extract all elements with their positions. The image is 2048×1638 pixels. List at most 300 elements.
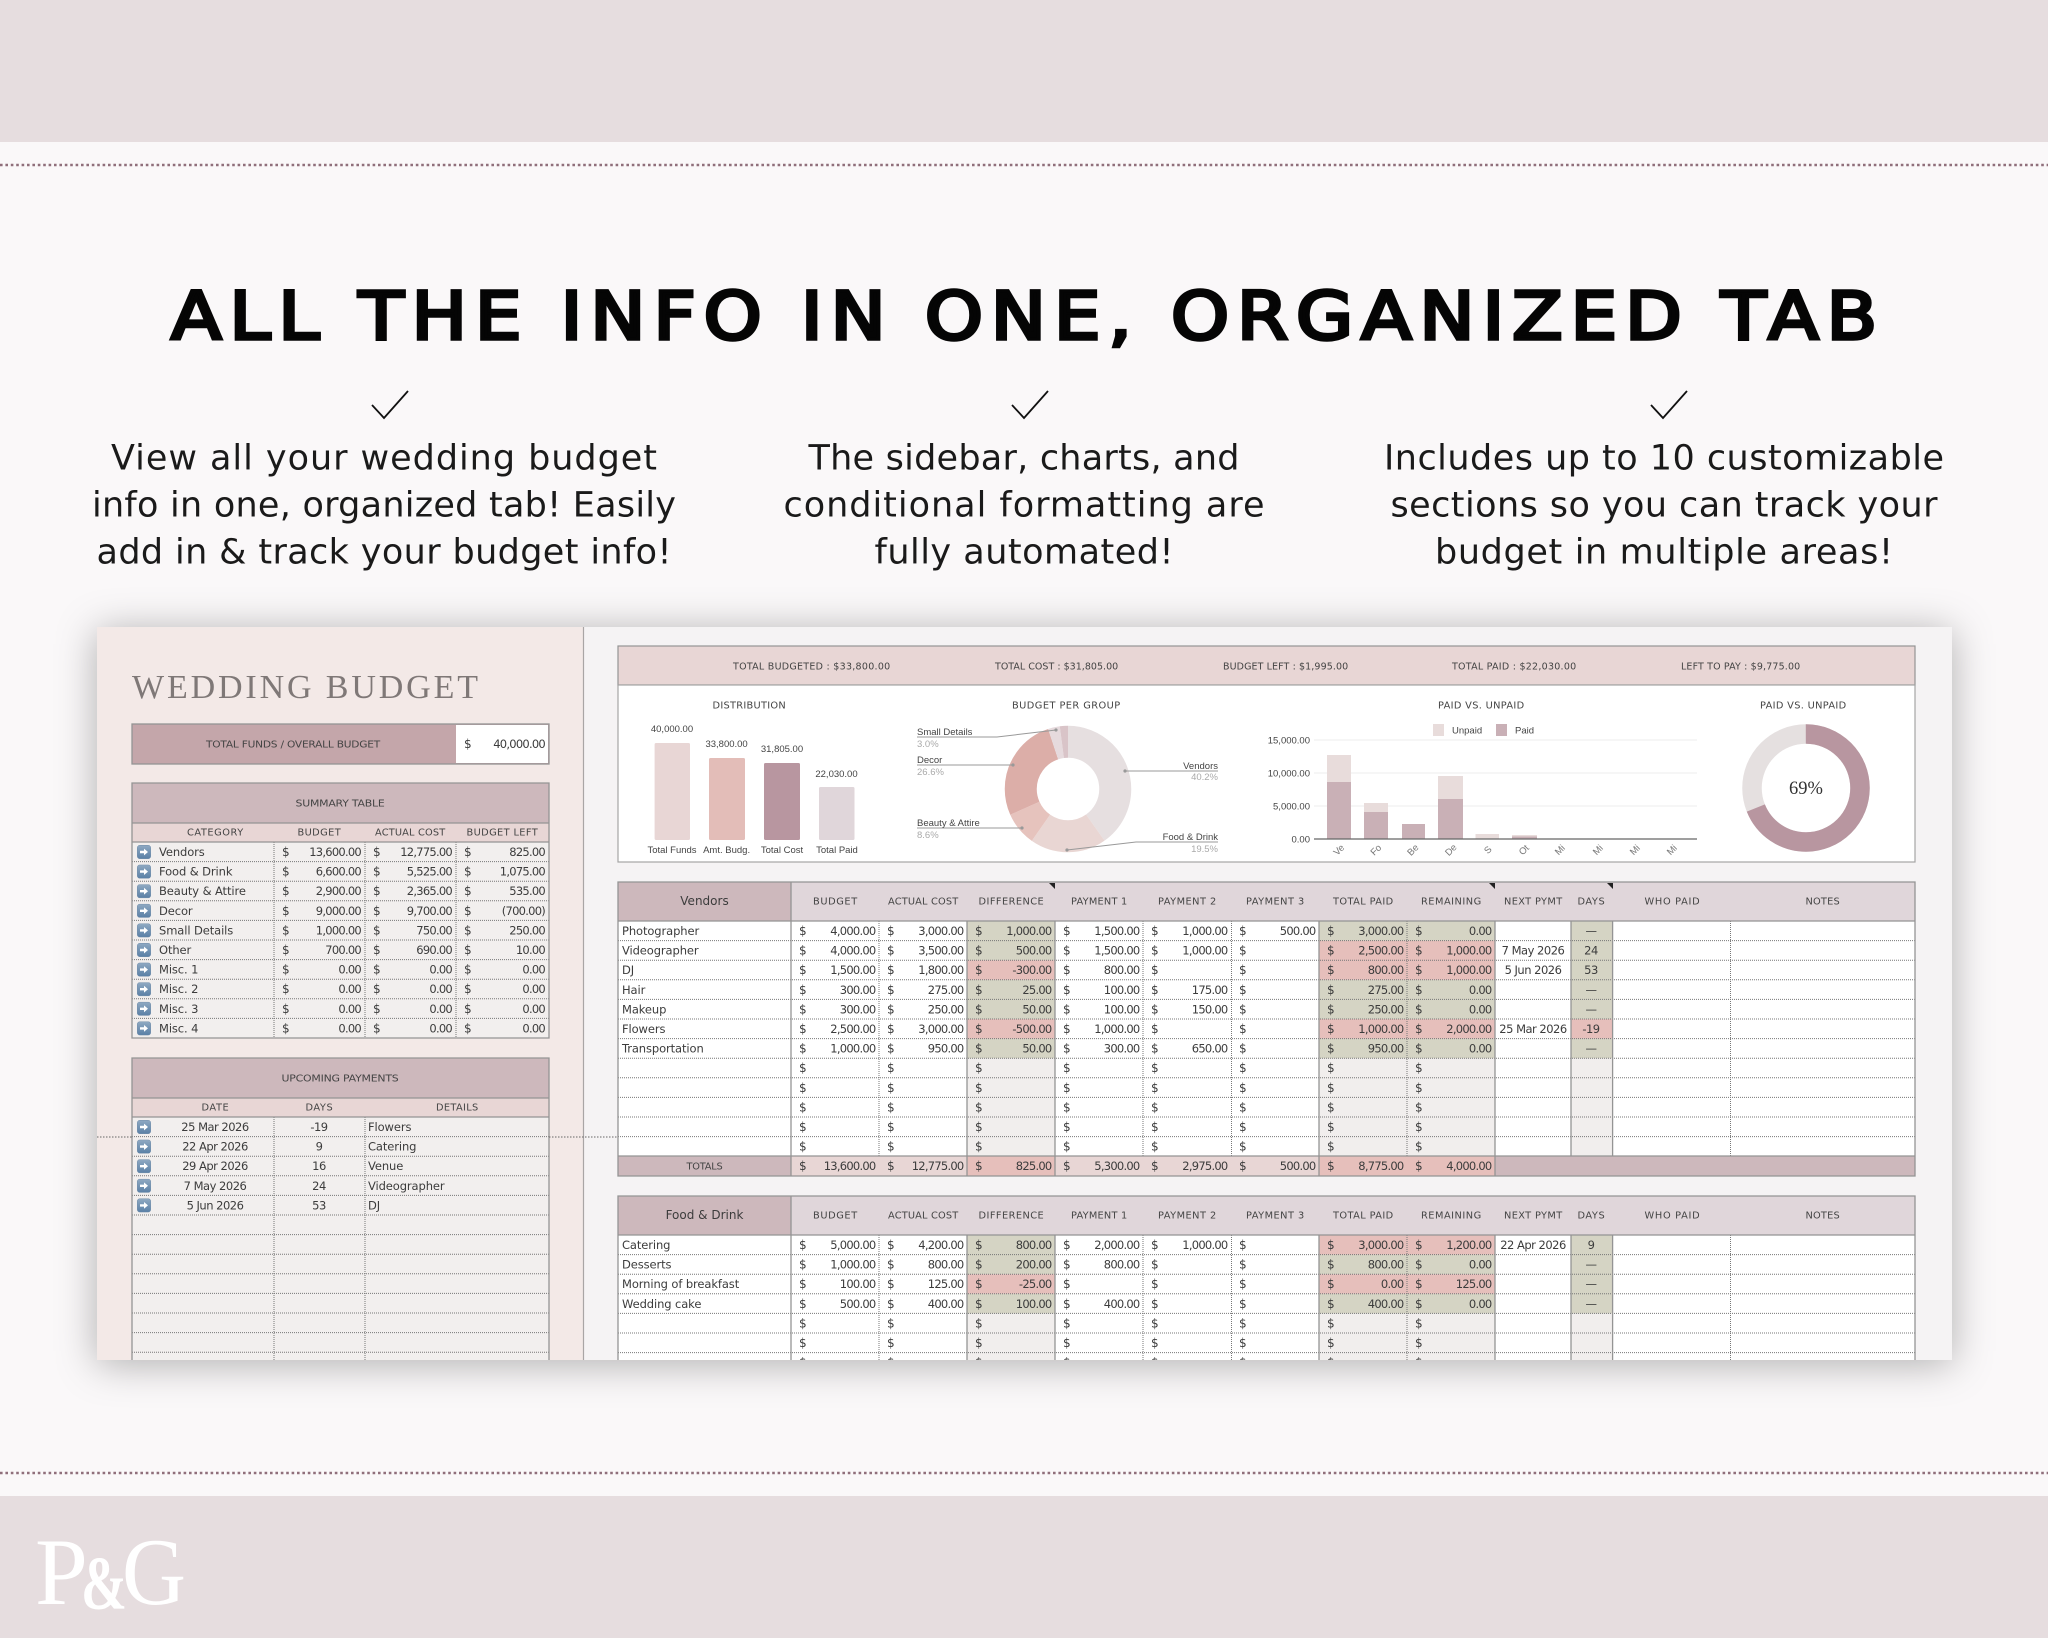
food and drink rows: $$$$$$$$ <box>799 1316 1423 1330</box>
vendors rows: TOTALS <box>685 1161 723 1172</box>
vendors rows: $$$$$$$$ <box>799 1120 1423 1134</box>
summary table: $$$ <box>282 865 472 879</box>
summary table: $$$ <box>282 884 472 898</box>
chart: budget per group donut: 19.5% <box>1191 844 1219 855</box>
vendors rows: 1,800.00 <box>918 963 964 977</box>
icon: check mark 2 <box>1012 391 1048 418</box>
logo: P&G: & <box>81 1542 127 1626</box>
logo: P&G <box>35 1519 186 1626</box>
food and drink header row: TOTAL PAID <box>1332 1210 1393 1221</box>
chart: budget per group donut: 26.6% <box>917 767 944 778</box>
summary table: 13,600.00 <box>309 845 361 859</box>
vendors rows: 3,000.00 <box>1358 924 1404 938</box>
chart: distribution bars: Total Funds <box>647 845 697 856</box>
chart: distribution bars: Total Paid <box>816 845 858 856</box>
summary table <box>132 783 549 1038</box>
upcoming payments table: 25 Mar 2026 <box>181 1120 249 1134</box>
vendors rows: $$$$$$$$ <box>799 983 1423 997</box>
upcoming payments table: -19 <box>310 1120 328 1134</box>
feature text 2: conditional formatting are <box>784 486 1264 526</box>
chart: budget per group donut: Vendors <box>1183 761 1218 772</box>
vendors rows: 5 Jun 2026 <box>1505 963 1562 977</box>
summary table: SUMMARY TABLE <box>296 798 384 809</box>
upcoming payments table: UPCOMING PAYMENTS <box>282 1073 398 1084</box>
food and drink header row: PAYMENT 1 <box>1071 1210 1127 1221</box>
food and drink rows: 0.00 <box>1469 1258 1492 1272</box>
total funds box: TOTAL FUNDS / OVERALL BUDGET <box>205 739 381 750</box>
summary table: Misc. 1 <box>159 963 198 977</box>
vendors rows: 1,000.00 <box>830 1042 876 1056</box>
food and drink header row: Food & Drink <box>666 1208 743 1222</box>
feature text 3: budget in multiple areas! <box>1435 532 1893 572</box>
chart: distribution bars <box>647 700 858 856</box>
chart: distribution bars: DISTRIBUTION <box>712 700 786 711</box>
vendors rows: 13,600.00 <box>824 1159 876 1173</box>
summary table: 2,900.00 <box>316 884 361 898</box>
food and drink rows: 0.00 <box>1469 1297 1492 1311</box>
chart: budget per group donut: 3.0% <box>917 739 939 750</box>
vendors rows: 1,500.00 <box>1094 944 1140 958</box>
food and drink rows: Wedding cake <box>622 1297 701 1311</box>
food and drink header row: ACTUAL COST <box>888 1210 959 1221</box>
vendors rows: 150.00 <box>1192 1002 1228 1016</box>
food and drink header row: PAYMENT 2 <box>1158 1210 1216 1221</box>
food and drink header row: NOTES <box>1806 1210 1840 1221</box>
summary table: (700.00) <box>502 904 545 918</box>
summary table: 700.00 <box>325 943 361 957</box>
feature text 2: The sidebar, charts, and <box>808 438 1240 478</box>
chart: budget per group donut: Food & Drink <box>1163 832 1218 843</box>
vendors rows: 650.00 <box>1192 1042 1228 1056</box>
summary table: 0.00 <box>338 963 361 977</box>
vendors rows: 175.00 <box>1192 983 1228 997</box>
vendors rows: 5,300.00 <box>1094 1159 1140 1173</box>
summary table: Other <box>159 943 192 957</box>
totals summary strip: TOTAL COST : $31,805.00 <box>994 661 1118 672</box>
vendors rows: $$$$$$$$ <box>799 1159 1423 1173</box>
food and drink header row: NEXT PYMT <box>1504 1210 1563 1221</box>
feature text 3: Includes up to 10 customizable <box>1384 438 1944 478</box>
food and drink rows: 100.00 <box>1016 1297 1052 1311</box>
upcoming payments table: Flowers <box>368 1120 411 1134</box>
vendors rows: $$$$$$$$ <box>799 944 1423 958</box>
vendors rows: Hair <box>622 983 646 997</box>
feature column 1 <box>92 391 676 572</box>
total funds box: 40,000.00 <box>493 737 545 751</box>
vendors rows: 950.00 <box>928 1042 964 1056</box>
chart: paid vs unpaid stacked bars: Be <box>1405 842 1421 858</box>
vendors rows: 2,975.00 <box>1182 1159 1228 1173</box>
chart: paid vs unpaid stacked bars: Unpaid <box>1452 726 1482 736</box>
vendors totals row fills <box>618 1156 1915 1176</box>
top band <box>0 0 2048 142</box>
vendors header row: REMAINING <box>1421 896 1481 907</box>
upcoming payments table: DATE <box>202 1102 228 1113</box>
summary table: Misc. 3 <box>159 1002 198 1016</box>
summary table: 250.00 <box>509 923 545 937</box>
food and drink header row: DIFFERENCE <box>978 1210 1044 1221</box>
food and drink rows: $$$$$$$$ <box>799 1356 1423 1370</box>
vendors rows: 0.00 <box>1469 1042 1492 1056</box>
summary table: 10.00 <box>516 943 545 957</box>
chart: paid percentage donut <box>1752 700 1860 842</box>
food and drink header row: BUDGET <box>813 1210 858 1221</box>
food and drink rows: 2,000.00 <box>1094 1238 1140 1252</box>
vendors rows: 53 <box>1584 963 1598 977</box>
vendors rows: Flowers <box>622 1022 665 1036</box>
food and drink table <box>618 1196 1915 1370</box>
vendors rows: $$$$$$$$ <box>799 1061 1423 1075</box>
upcoming payments table: 29 Apr 2026 <box>182 1159 248 1173</box>
logo: P&G: P <box>35 1519 88 1625</box>
chart: paid vs unpaid stacked bars: Ve <box>1332 843 1347 858</box>
food and drink rows: 1,200.00 <box>1446 1238 1492 1252</box>
vendors rows: 800.00 <box>1368 963 1404 977</box>
vendors rows: 800.00 <box>1104 963 1140 977</box>
summary table: Misc. 4 <box>159 1021 198 1035</box>
upcoming payments table: DJ <box>368 1198 380 1212</box>
chart: paid vs unpaid stacked bars: 5,000.00 <box>1273 802 1310 812</box>
vendors rows: 825.00 <box>1016 1159 1052 1173</box>
vendors header row: DIFFERENCE <box>978 896 1044 907</box>
vendors rows: 7 May 2026 <box>1502 944 1565 958</box>
summary table: $$$ <box>282 1002 472 1016</box>
vendors rows: 2,500.00 <box>1358 944 1404 958</box>
vendors rows: 4,000.00 <box>830 924 876 938</box>
upcoming payments table <box>132 1058 549 1360</box>
bottom band <box>0 1496 2048 1638</box>
food and drink header row <box>618 1196 1915 1235</box>
totals summary strip: TOTAL PAID : $22,030.00 <box>1451 661 1576 672</box>
summary table: 825.00 <box>509 845 545 859</box>
vendors rows: 100.00 <box>1104 983 1140 997</box>
food and drink rows: Catering <box>622 1238 670 1252</box>
upcoming payments table: 7 May 2026 <box>184 1179 247 1193</box>
chart: budget per group donut <box>917 700 1219 855</box>
spreadsheet screenshot <box>97 627 1915 1370</box>
vendors header row <box>618 882 1915 921</box>
food and drink rows: 9 <box>1588 1238 1595 1252</box>
vendors rows: 275.00 <box>928 983 964 997</box>
summary table: 12,775.00 <box>400 845 452 859</box>
summary table: Vendors <box>159 845 205 859</box>
vendors rows: 4,000.00 <box>830 944 876 958</box>
chart: paid vs unpaid stacked bars: Mi <box>1591 843 1606 858</box>
totals summary strip: LEFT TO PAY : $9,775.00 <box>1681 661 1800 672</box>
food and drink rows: 3,000.00 <box>1358 1238 1404 1252</box>
chart: paid vs unpaid stacked bars: PAID VS. UNPAID <box>1438 700 1524 711</box>
food and drink rows: 0.00 <box>1381 1277 1404 1291</box>
food and drink rows: 1,000.00 <box>1182 1238 1228 1252</box>
food and drink rows: 500.00 <box>840 1297 876 1311</box>
summary table: $$$ <box>282 943 472 957</box>
vendors rows: 1,000.00 <box>1446 944 1492 958</box>
sidebar panel <box>97 627 584 1360</box>
feature text 3: sections so you can track your <box>1390 486 1938 526</box>
vendors rows: 3,000.00 <box>918 1022 964 1036</box>
vendors rows <box>621 924 1600 1173</box>
chart: paid vs unpaid stacked bars: S <box>1482 844 1494 856</box>
vendors rows: $$$$$$$$ <box>799 1100 1423 1114</box>
chart: budget per group donut: BUDGET PER GROUP <box>1012 700 1120 711</box>
summary table: 0.00 <box>429 963 452 977</box>
food and drink rows: Desserts <box>622 1258 672 1272</box>
summary table: $$$ <box>282 845 472 859</box>
feature column 2 <box>784 391 1264 572</box>
chart: paid vs unpaid stacked bars: Mi <box>1665 843 1680 858</box>
chart: budget per group donut: Small Details <box>917 727 973 738</box>
spreadsheet shadow <box>97 627 1952 1360</box>
summary table: $$$ <box>282 904 472 918</box>
food and drink rows: — <box>1586 1297 1596 1311</box>
summary table: 9,000.00 <box>316 904 361 918</box>
page guide line <box>97 1136 618 1138</box>
vendors rows: Makeup <box>622 1002 666 1016</box>
chart: paid vs unpaid stacked bars: Fo <box>1369 843 1384 858</box>
chart: distribution bars: 33,800.00 <box>705 739 748 750</box>
vendors rows: -300.00 <box>1012 963 1052 977</box>
chart: paid vs unpaid stacked bars: 10,000.00 <box>1268 768 1310 780</box>
chart: distribution bars: 31,805.00 <box>761 744 803 755</box>
summary table: 0.00 <box>522 963 545 977</box>
chart: paid vs unpaid stacked bars: Mi <box>1553 843 1568 858</box>
vendors rows: $$$$$$$$ <box>799 1140 1423 1154</box>
summary table: 5,525.00 <box>407 865 452 879</box>
chart: paid vs unpaid stacked bars: 0.00 <box>1292 834 1310 846</box>
vendors header row: PAYMENT 3 <box>1246 896 1304 907</box>
vendors row fills <box>618 921 1915 1176</box>
totals summary strip: TOTAL BUDGETED : $33,800.00 <box>732 661 890 672</box>
upcoming payments table: 53 <box>312 1198 326 1212</box>
chart: budget per group donut: 40.2% <box>1191 772 1219 783</box>
summary table: 750.00 <box>416 923 452 937</box>
food and drink header row: REMAINING <box>1421 1210 1481 1221</box>
food and drink rows <box>622 1238 1596 1370</box>
vendors rows: Videographer <box>622 944 699 958</box>
vendors header row: NOTES <box>1806 896 1840 907</box>
vendors rows: 4,000.00 <box>1446 1159 1492 1173</box>
vendors rows: 25.00 <box>1022 983 1052 997</box>
summary table: Food & Drink <box>159 865 233 879</box>
upcoming payments table: 5 Jun 2026 <box>187 1198 244 1212</box>
chart: paid vs unpaid stacked bars: 15,000.00 <box>1268 736 1310 746</box>
summary table: $$$ <box>282 1021 472 1035</box>
summary table: 1,000.00 <box>316 923 361 937</box>
summary table: BUDGET <box>298 827 342 838</box>
vendors rows: 300.00 <box>840 983 876 997</box>
food and drink rows: 800.00 <box>928 1258 964 1272</box>
summary table: 690.00 <box>416 943 452 957</box>
chart: paid percentage donut: 69% <box>1789 779 1823 799</box>
upcoming payments table: Venue <box>368 1159 403 1173</box>
summary table: 0.00 <box>522 1002 545 1016</box>
chart: distribution bars: Total Cost <box>761 845 803 856</box>
food and drink row fills <box>618 1235 1915 1360</box>
vendors rows: 950.00 <box>1368 1042 1404 1056</box>
food and drink rows: Morning of breakfast <box>622 1277 740 1291</box>
total funds box: $ <box>464 737 472 751</box>
chart: distribution bars: 40,000.00 <box>651 724 693 735</box>
vendors rows: 2,500.00 <box>830 1022 876 1036</box>
title: ALL THE INFO IN ONE, ORGANIZED TAB <box>171 278 1885 355</box>
summary table: CATEGORY <box>187 827 243 838</box>
food and drink rows: 800.00 <box>1016 1238 1052 1252</box>
vendors rows: 500.00 <box>1280 1159 1316 1173</box>
chart: budget per group donut: 8.6% <box>917 830 939 841</box>
upcoming payments table: 22 Apr 2026 <box>182 1140 248 1154</box>
food and drink rows: 5,000.00 <box>830 1238 876 1252</box>
vendors rows: 300.00 <box>840 1002 876 1016</box>
totals summary strip <box>618 646 1915 685</box>
food and drink rows: 100.00 <box>840 1277 876 1291</box>
vendors rows: 275.00 <box>1368 983 1404 997</box>
vendors header row: TOTAL PAID <box>1332 896 1393 907</box>
summary table: 535.00 <box>509 884 545 898</box>
chart: distribution bars: Amt. Budg. <box>703 845 750 856</box>
vendors rows: 500.00 <box>1016 944 1052 958</box>
feature text 1: View all your wedding budget <box>111 438 657 478</box>
vendors rows: 1,500.00 <box>830 963 876 977</box>
vendors rows: 1,000.00 <box>1358 1022 1404 1036</box>
vendors rows: 1,000.00 <box>1182 924 1228 938</box>
vendors rows: 50.00 <box>1022 1042 1052 1056</box>
vendors header row: PAYMENT 2 <box>1158 896 1216 907</box>
vendors rows: $$$$$$$$ <box>799 1042 1423 1056</box>
upcoming payments table: 24 <box>312 1179 326 1193</box>
totals summary strip: BUDGET LEFT : $1,995.00 <box>1223 661 1348 672</box>
food and drink rows: $$$$$$$$ <box>799 1258 1423 1272</box>
feature text 1: info in one, organized tab! Easily <box>92 486 676 526</box>
bottom dotted divider <box>0 1472 2048 1474</box>
food and drink rows: $$$$$$$$ <box>799 1336 1423 1350</box>
vendors rows: Transportation <box>621 1042 704 1056</box>
summary table: 0.00 <box>338 1002 361 1016</box>
summary table: 2,365.00 <box>407 884 452 898</box>
food and drink rows: — <box>1586 1258 1596 1272</box>
vendors rows: — <box>1586 924 1596 938</box>
summary table: 0.00 <box>338 982 361 996</box>
summary table: $$$ <box>282 963 472 977</box>
food and drink rows: 1,000.00 <box>830 1258 876 1272</box>
chart: paid vs unpaid stacked bars: Mi <box>1628 843 1643 858</box>
summary table: 1,075.00 <box>500 865 545 879</box>
charts panel <box>618 685 1915 862</box>
chart: paid vs unpaid stacked bars: Paid <box>1515 726 1534 736</box>
vendors rows: DJ <box>622 963 634 977</box>
sidebar heading: WEDDING BUDGET <box>132 669 481 706</box>
vendors header row: WHO PAID <box>1644 896 1700 907</box>
icon: check mark 3 <box>1651 391 1687 418</box>
chart: budget per group donut: Decor <box>917 755 942 766</box>
vendors rows: 500.00 <box>1280 924 1316 938</box>
vendors rows: 1,000.00 <box>1006 924 1052 938</box>
food and drink rows: 125.00 <box>928 1277 964 1291</box>
food and drink rows: 800.00 <box>1368 1258 1404 1272</box>
summary table: Small Details <box>159 923 233 937</box>
vendors rows: Photographer <box>622 924 699 938</box>
chart: budget per group donut: Beauty & Attire <box>917 818 980 829</box>
vendors rows: 8,775.00 <box>1358 1159 1404 1173</box>
summary table: $$$ <box>282 982 472 996</box>
upcoming payments table: Videographer <box>368 1179 445 1193</box>
summary table: 0.00 <box>338 1021 361 1035</box>
chart: distribution bars: 22,030.00 <box>815 769 858 780</box>
summary table: BUDGET LEFT <box>466 827 539 838</box>
vendors rows: 25 Mar 2026 <box>1499 1022 1567 1036</box>
summary table: ACTUAL COST <box>375 827 446 838</box>
vendors rows: 3,500.00 <box>918 944 964 958</box>
vendors header row: BUDGET <box>813 896 858 907</box>
vendors rows: -19 <box>1582 1022 1600 1036</box>
summary table: 9,700.00 <box>407 904 452 918</box>
vendors rows: $$$$$$$$ <box>799 1022 1423 1036</box>
vendors rows: 250.00 <box>928 1002 964 1016</box>
summary table: $$$ <box>282 923 472 937</box>
vendors rows: 50.00 <box>1022 1002 1052 1016</box>
vendors rows: — <box>1586 1042 1596 1056</box>
summary table: Decor <box>159 904 193 918</box>
food and drink header row: DAYS <box>1578 1210 1604 1221</box>
icon: check mark 1 <box>372 391 408 418</box>
vendors header row: Vendors <box>680 894 729 908</box>
vendors rows: 0.00 <box>1469 983 1492 997</box>
food and drink rows: $$$$$$$$ <box>799 1297 1423 1311</box>
logo: P&G: G <box>122 1519 186 1625</box>
food and drink rows: — <box>1586 1277 1596 1291</box>
vendors rows: 1,500.00 <box>1094 924 1140 938</box>
summary table: 0.00 <box>522 1021 545 1035</box>
feature column 3 <box>1384 391 1944 572</box>
summary table: 0.00 <box>429 1021 452 1035</box>
food and drink rows: 800.00 <box>1104 1258 1140 1272</box>
vendors rows: — <box>1586 1002 1596 1016</box>
food and drink rows: -25.00 <box>1019 1277 1052 1291</box>
total funds box <box>132 724 549 764</box>
food and drink rows: 200.00 <box>1016 1258 1052 1272</box>
vendors rows: $$$$$$$$ <box>799 1002 1423 1016</box>
summary table: 0.00 <box>522 982 545 996</box>
summary table: 0.00 <box>429 1002 452 1016</box>
feature text 2: fully automated! <box>874 532 1174 572</box>
food and drink rows: 400.00 <box>928 1297 964 1311</box>
vendors rows: -500.00 <box>1012 1022 1052 1036</box>
vendors rows: 100.00 <box>1104 1002 1140 1016</box>
food and drink rows: 125.00 <box>1456 1277 1492 1291</box>
food and drink header row: PAYMENT 3 <box>1246 1210 1304 1221</box>
vendors rows: $$$$$$$$ <box>799 1081 1423 1095</box>
food and drink header row: WHO PAID <box>1644 1210 1700 1221</box>
vendors rows: — <box>1586 983 1596 997</box>
vendors rows: 1,000.00 <box>1446 963 1492 977</box>
vendors rows: 24 <box>1584 944 1598 958</box>
upcoming payments table: DAYS <box>306 1102 332 1113</box>
vendors rows: $$$$$$$$ <box>799 924 1423 938</box>
upcoming payments table: 9 <box>316 1140 323 1154</box>
vendors rows: 0.00 <box>1469 924 1492 938</box>
chart: paid vs unpaid stacked bars <box>1268 700 1697 859</box>
vendors rows: 1,000.00 <box>1094 1022 1140 1036</box>
chart: paid percentage donut: PAID VS. UNPAID <box>1760 700 1846 711</box>
food and drink rows: 400.00 <box>1368 1297 1404 1311</box>
vendors rows: 1,000.00 <box>1182 944 1228 958</box>
vendors rows: 3,000.00 <box>918 924 964 938</box>
vendors rows: 0.00 <box>1469 1002 1492 1016</box>
top dotted divider <box>0 164 2048 166</box>
upcoming payments table: 16 <box>312 1159 326 1173</box>
summary table: 6,600.00 <box>316 865 361 879</box>
upcoming payments table: DETAILS <box>436 1102 478 1113</box>
vendors header row: PAYMENT 1 <box>1071 896 1127 907</box>
